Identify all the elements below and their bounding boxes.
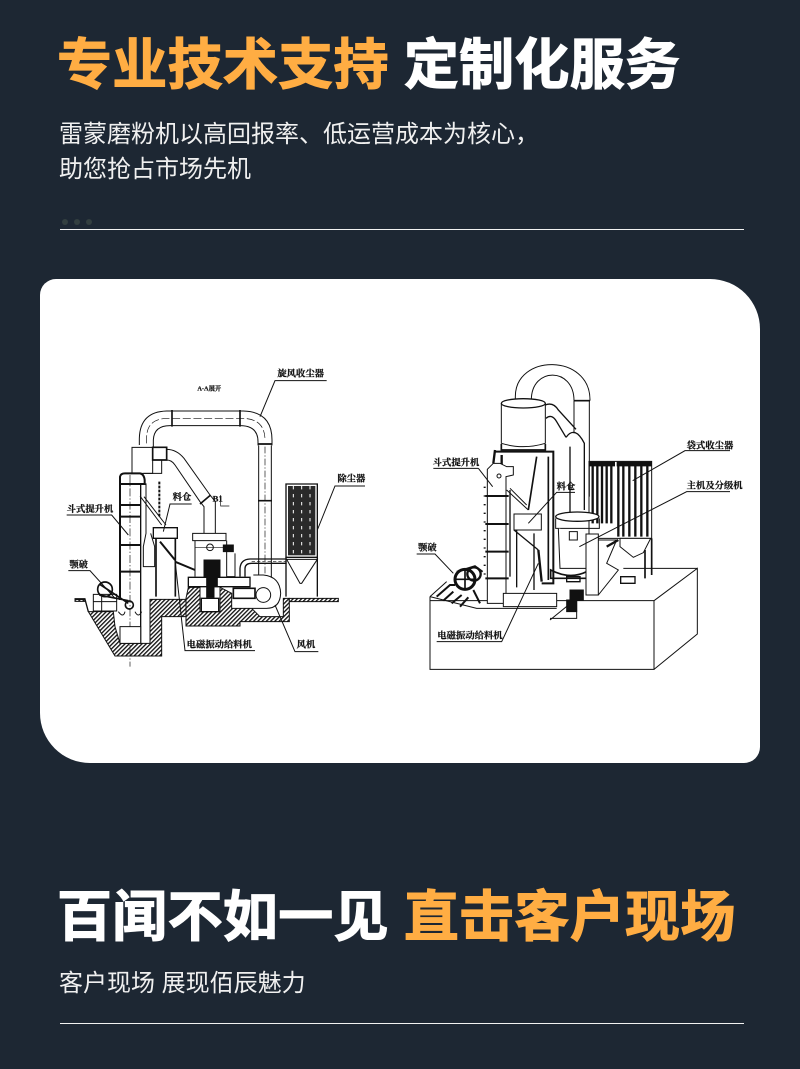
diagram labels: 主机及分级机	[687, 479, 743, 491]
diagram labels: 风机	[297, 638, 316, 650]
filter bars fill	[288, 486, 315, 555]
diagram: section view of mill system	[66, 368, 366, 667]
title: customer site: 百闻不如一见 直击客户现场	[57, 886, 736, 948]
panel: white diagram card	[40, 279, 760, 763]
diagram labels: 颚破	[69, 558, 89, 570]
diagram labels	[418, 439, 743, 641]
title: technical support and custom service: 专业技术支持 定制化服务	[57, 34, 680, 96]
mill drive	[204, 560, 220, 597]
cyclone drum	[501, 403, 545, 447]
mill	[556, 518, 599, 528]
bag filter	[589, 461, 652, 538]
diagram labels: 袋式收尘器	[687, 439, 734, 451]
diagram labels: 旋风收尘器	[277, 368, 325, 380]
cyclone	[132, 447, 153, 473]
leader lines	[417, 451, 730, 642]
elevator	[487, 463, 513, 603]
diagram labels	[67, 368, 366, 650]
diagram labels: 斗式提升机	[67, 503, 114, 515]
elevator	[120, 473, 145, 600]
diagram labels: 料仓	[173, 491, 192, 503]
diagram labels: A-A展开	[197, 384, 222, 393]
crusher	[98, 582, 112, 597]
frame	[494, 452, 553, 583]
leader lines	[67, 381, 365, 652]
diagram labels: 颚破	[418, 542, 437, 554]
big duct	[515, 365, 590, 401]
subtitle text: 客户现场 展现佰辰魅力	[59, 970, 306, 997]
description text: 助您抢占市场先机	[59, 156, 251, 183]
diagram labels: 电磁振动给料机	[187, 638, 253, 650]
pit	[550, 598, 577, 620]
hopper	[514, 514, 541, 530]
mill	[193, 533, 226, 541]
duct top	[139, 411, 272, 445]
diagram labels: 斗式提升机	[433, 457, 480, 469]
ground line	[75, 599, 88, 612]
duct to mill	[545, 404, 576, 429]
diagram labels: 电磁振动给料机	[437, 629, 503, 641]
description text	[59, 121, 539, 183]
duct to mill	[167, 449, 215, 533]
ground hatching	[75, 587, 338, 656]
diagram: 3D view of mill system	[416, 364, 743, 670]
description text: 雷蒙磨粉机以高回报率、低运营成本为核心，	[59, 121, 539, 148]
diagram labels: 除尘器	[337, 473, 366, 485]
diagram labels: B1	[213, 494, 223, 504]
crusher	[455, 569, 475, 589]
filter	[286, 484, 317, 557]
decorative dots	[62, 219, 92, 225]
base block	[430, 597, 654, 669]
hopper	[153, 528, 177, 538]
fan pipe	[240, 559, 287, 577]
diagram labels: 料仓	[557, 480, 576, 492]
